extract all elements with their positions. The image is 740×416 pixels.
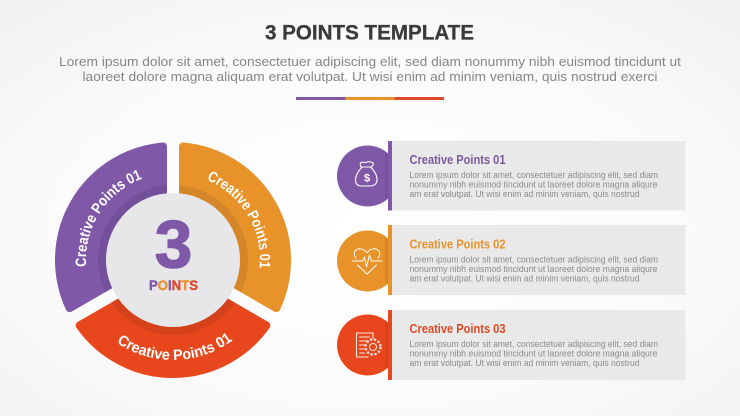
body 03: Lorem ipsum dolor sit amet, consectetuer adipiscing elit, sed diam [410,339,658,349]
big number 3: 3 [155,208,192,282]
body 02: am erat volutpat. Ut wisi enim ad minim veniam, quis nostrud [410,274,640,284]
description text: laoreet dolore magna aliquam erat volutpat. Ut wisi enim ad minim veniam, quis nostrud exerci [82,70,658,84]
segment: red [76,298,270,378]
segment: purple [55,142,167,312]
circle badge 01 [337,146,388,206]
circle badge 03 [337,314,388,376]
panel: point 03 [330,309,686,381]
icon: document with gear [356,333,380,357]
label: purple segment: Creative Points 01 [76,170,142,266]
description text: Lorem ipsum dolor sit amet, consectetuer adipiscing elit, sed diam nonummy nibh euismod tincidunt ut [59,55,682,69]
accent bar 01 [388,141,392,210]
accent bar 03 [388,310,392,380]
center circle [106,193,240,327]
accent bar 02 [388,225,392,295]
body 02 [410,254,658,284]
segment: orange [179,142,291,312]
panel: point 02 [330,225,686,297]
body 03: am erat volutpat. Ut wisi enim ad minim veniam, quis nostrud [410,358,640,368]
POINTS word: POINTS [149,277,198,293]
title: 3 POINTS TEMPLATE [265,22,474,44]
description text [59,55,682,84]
label: red segment: Creative Points 01 [118,333,232,360]
label: orange segment: Creative Points 01 [208,172,270,268]
body 02: nonummy nibh euismod tincidunt ut laoreet dolore magna aliqure [410,264,658,274]
tricolor divider [296,97,444,100]
circle badge 02 [337,230,388,292]
body 01: am erat volutpat. Ut wisi enim ad minim veniam, quis nostrud [410,189,640,199]
body 02: Lorem ipsum dolor sit amet, consectetuer adipiscing elit, sed diam [410,254,658,264]
heading 02: Creative Points 02 [410,238,506,252]
icon: money bag: $ [364,172,370,184]
icon: heart pulse [352,249,382,274]
panel: point 01 [330,140,686,212]
body 01 [410,170,658,199]
donut chart [55,142,291,378]
heading 03: Creative Points 03 [410,322,506,336]
body 01: Lorem ipsum dolor sit amet, consectetuer adipiscing elit, sed diam [410,170,658,180]
heading 01: Creative Points 01 [410,153,506,167]
body 03 [410,339,658,368]
body 01: nonummy nibh euismod tincidunt ut laoreet dolore magna aliqure [410,180,658,190]
body 03: nonummy nibh euismod tincidunt ut laoreet dolore magna aliqure [410,348,658,358]
icon: money bag [356,162,377,186]
